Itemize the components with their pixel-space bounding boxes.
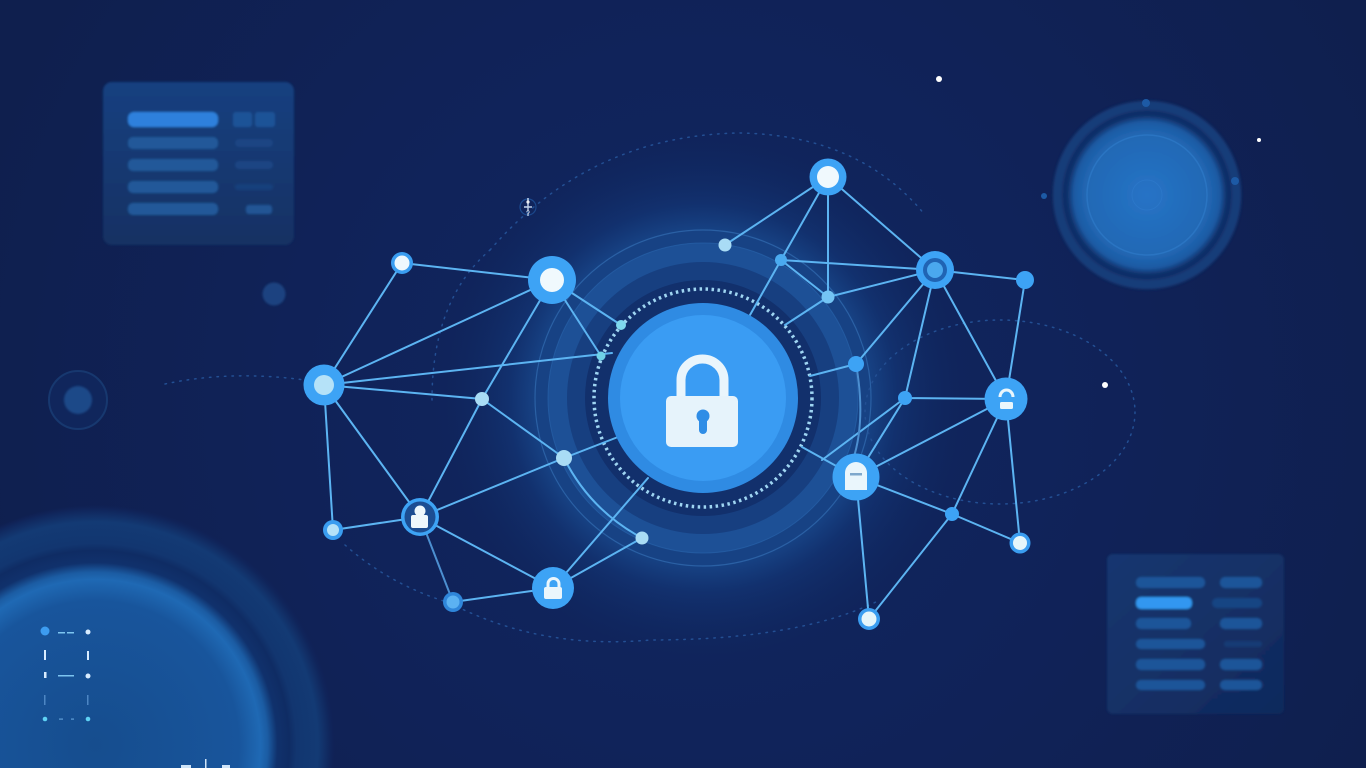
dotted ring	[594, 289, 812, 507]
icon: padlock	[666, 359, 738, 447]
network nodes	[304, 158, 1034, 630]
gauge: bottom-left large circle	[0, 505, 335, 768]
white star dots	[936, 76, 1261, 388]
small link nodes	[475, 238, 1034, 544]
central glow and rings	[433, 128, 973, 668]
central lock disc	[608, 303, 798, 493]
decorative circle left	[49, 371, 107, 429]
icon: small crosshair	[520, 198, 536, 216]
dotted orbit ellipses	[165, 133, 1135, 642]
node: large lock right	[832, 454, 880, 500]
node: white bottom	[858, 608, 880, 630]
node: large white	[528, 256, 576, 304]
node: top white	[810, 158, 846, 196]
node: left hub	[304, 364, 344, 406]
node: white ring top-left	[391, 252, 413, 274]
node: lock bottom	[532, 567, 574, 609]
gauge: top-right circle	[1041, 99, 1243, 291]
node: user lock	[401, 498, 439, 536]
panel: bottom-right UI card	[1107, 554, 1284, 714]
node: white lower right	[1010, 532, 1030, 554]
panel: top-left UI card	[103, 82, 294, 245]
node: cloud lock	[984, 378, 1028, 420]
decorative dot	[262, 282, 286, 306]
node: small bottom	[443, 592, 463, 612]
node: small left	[323, 520, 343, 540]
icon: dashed grid on large circle	[40, 626, 230, 768]
network links	[324, 177, 1025, 619]
node: ringed	[916, 251, 954, 289]
